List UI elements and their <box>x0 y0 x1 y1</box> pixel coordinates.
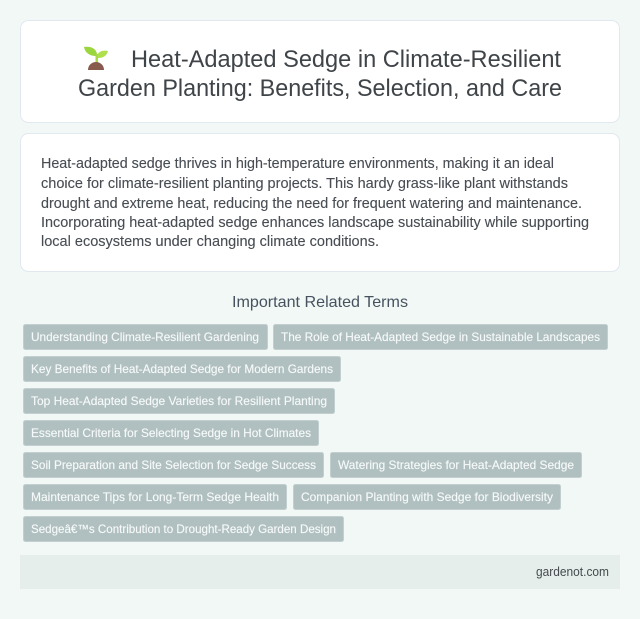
tag <box>24 420 318 446</box>
text block: description: drought and extreme heat, reducing the need for frequent watering and maintenance. <box>41 195 582 212</box>
tag: Maintenance Tips for Long-Term Sedge Health <box>31 490 279 504</box>
tag: The Role of Heat-Adapted Sedge in Sustainable Landscapes <box>281 330 600 344</box>
heading: title <box>78 46 562 102</box>
tag: Essential Criteria for Selecting Sedge in Hot Climates <box>31 426 311 440</box>
text block: description: Incorporating heat-adapted sedge enhances landscape sustainability while supporting <box>41 214 589 231</box>
tag <box>24 356 340 382</box>
footer credit: gardenot.com <box>536 564 609 579</box>
heading: title: Garden Planting: Benefits, Selection, and Care <box>78 75 562 102</box>
tag <box>24 484 286 510</box>
text block: description <box>41 155 589 250</box>
tag: Sedgeâ€™s Contribution to Drought-Ready Garden Design <box>31 522 336 536</box>
icon: seedling <box>84 47 108 70</box>
heading: title: Heat-Adapted Sedge in Climate-Resilient <box>131 46 561 73</box>
panel: description card <box>20 134 620 272</box>
tag <box>330 452 582 478</box>
tag <box>24 452 324 478</box>
tag <box>294 484 560 510</box>
tag: Understanding Climate-Resilient Gardening <box>31 330 259 344</box>
tag list <box>24 324 608 542</box>
tag: Watering Strategies for Heat-Adapted Sedge <box>338 458 574 472</box>
tag: Top Heat-Adapted Sedge Varieties for Resilient Planting <box>31 394 327 408</box>
tag: Companion Planting with Sedge for Biodiversity <box>301 490 553 504</box>
text block: description: local ecosystems under changing climate conditions. <box>41 233 379 250</box>
text block: description: choice for climate-resilient planting projects. This hardy grass-like plant withstands <box>41 175 568 192</box>
tag <box>274 324 608 350</box>
footer <box>20 555 620 589</box>
tag: Soil Preparation and Site Selection for Sedge Success <box>31 458 316 472</box>
tag: Key Benefits of Heat-Adapted Sedge for Modern Gardens <box>31 362 333 376</box>
panel: title card <box>20 20 620 122</box>
tag <box>24 516 344 542</box>
tag <box>24 324 268 350</box>
heading: important related terms: Important Related Terms <box>232 294 408 311</box>
tag <box>24 388 334 414</box>
text block: description: Heat-adapted sedge thrives in high-temperature environments, making it an ideal <box>41 155 554 172</box>
